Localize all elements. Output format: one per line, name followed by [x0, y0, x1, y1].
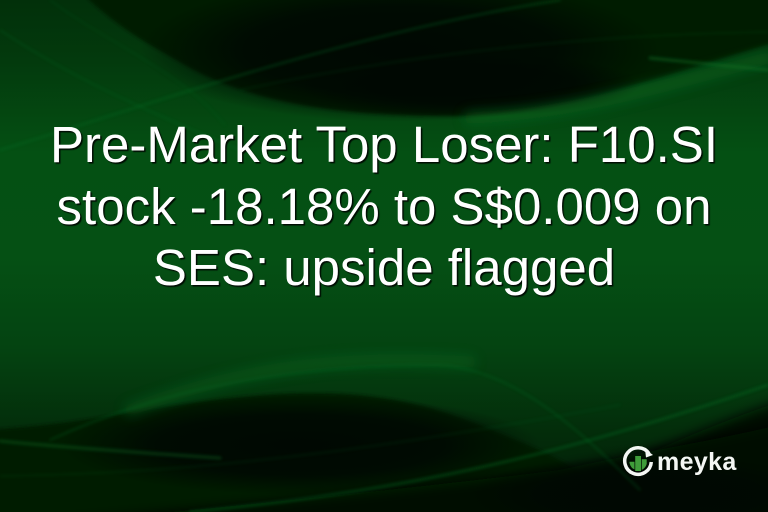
logo: meyka: [622, 446, 737, 476]
icon: ring with green bars: [622, 446, 653, 476]
title: headline text: [50, 116, 718, 298]
logo wordmark: meyka: [657, 448, 737, 476]
title: headline text: stock -18.18% to S$0.009 on: [57, 178, 711, 234]
title: headline text: SES: upside flagged: [153, 239, 615, 296]
title: headline text: Pre-Market Top Loser: F10.SI: [50, 116, 718, 173]
bottom dark swoosh: [0, 393, 640, 512]
top dark swoosh: [70, 0, 768, 116]
